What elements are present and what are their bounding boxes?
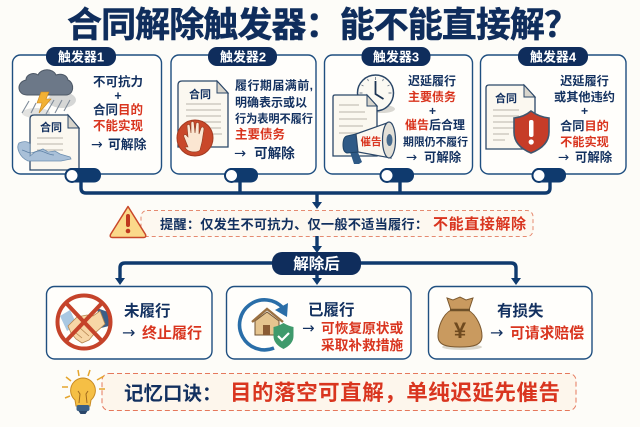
text: trigger 3 conditions: + [429,104,436,118]
text: trigger 3 conditions: 主要债务 [408,89,456,104]
text: trigger 4 conditions [554,73,615,166]
text: trigger 2 conditions: 明确表示或以 [235,94,307,110]
connector knobs [65,168,566,182]
icon: document [333,95,377,156]
text: performed outcome: 已履行 [308,301,355,319]
connector network from triggers [81,180,550,209]
panel: not performed [46,286,212,359]
text: not performed outcome: 未履行 [124,302,171,320]
text: trigger 3 conditions: → [406,150,417,166]
text: trigger 1 conditions: + [114,89,122,103]
text: trigger 4 conditions: → [558,150,569,166]
heading: trigger 1: 触发器1 [58,50,104,64]
heading: trigger 2 [208,47,277,66]
text: trigger 2 conditions: 行为表明不履行 [235,112,313,126]
text: performed outcome: 可恢复原状或 [321,320,403,336]
text: trigger 3 conditions: 催告后合理 [405,117,465,132]
icon: money bag [438,297,482,350]
text: trigger 1 conditions: 不能实现 [93,118,143,133]
icon: contract document [486,85,535,149]
callout: warning reminder: 不能直接解除 [433,215,526,233]
heading: trigger 4: 触发器4 [530,50,577,64]
text: trigger 4 conditions: 可解除 [575,150,613,164]
callout: memory tip: 目的落空可直解，单纯迟延先催告 [230,381,560,405]
text: performed outcome: 采取补救措施 [321,337,403,353]
icon: light bulb [62,370,105,414]
text: trigger 3 conditions: 期限仍不履行 [403,134,468,148]
arrow: to after-termination [312,236,322,253]
text: trigger 3 conditions: 可解除 [424,150,462,164]
heading: trigger 2: 触发器2 [220,50,266,64]
icon: storm cloud [19,70,76,118]
icon: megaphone: 催告 [360,135,382,148]
heading: trigger 3: 触发器3 [373,50,419,64]
text: loss outcome: 有损失 [497,302,544,320]
text: not performed outcome: 终止履行 [142,324,202,342]
panel: trigger 1 [12,47,162,174]
icon: warning shield [514,111,549,153]
panel: trigger 2 [171,47,316,174]
icon: stop hand [177,120,213,156]
text: trigger 3 conditions [403,73,468,166]
icon: contract document: 合同 [40,120,62,134]
text: trigger 2 conditions: 可解除 [254,145,295,161]
icon: contract document: 合同 [495,91,517,105]
text: trigger 1 conditions: 不可抗力 [93,74,143,89]
heading: trigger 4 [518,47,588,66]
text: trigger 3 conditions: 迟延履行 [408,73,456,88]
text: not performed outcome: → [122,323,135,342]
text: trigger 1 conditions: 合同目的 [93,102,143,117]
text: trigger 2 conditions: 履行期届满前, [235,78,313,92]
text: not performed outcome [122,302,202,342]
panel: performed [226,286,411,359]
icon: crossed handshake [58,296,110,348]
heading: after termination: 解除后 [293,254,340,273]
text: trigger 2 conditions [234,78,313,162]
icon: flood water [18,142,71,161]
text: loss outcome: 可请求赔偿 [510,324,584,342]
text: trigger 2 conditions: → [234,146,246,162]
text: trigger 4 conditions: 或其他违约 [554,89,615,104]
text: trigger 4 conditions: + [581,104,588,118]
panel: loss [428,286,592,359]
text: loss outcome: → [490,323,503,342]
icon: warning triangle [110,206,146,238]
text: trigger 1 conditions [91,74,147,153]
text: performed outcome: → [302,319,315,337]
icon: clock [358,75,395,113]
callout: warning reminder [110,206,533,238]
text: performed outcome [302,301,403,353]
heading: trigger 3 [362,47,430,66]
panel: trigger 3 [324,47,472,174]
icon: contract document [30,115,79,170]
text: trigger 4 conditions: 合同目的 [560,118,609,133]
heading: trigger 1 [46,47,116,66]
heading: after termination [272,252,361,275]
icon: megaphone [343,122,396,164]
text: trigger 1 conditions: → [91,137,103,153]
text: trigger 4 conditions: 不能实现 [560,134,609,149]
callout: memory tip [62,370,576,414]
text: loss outcome [490,302,584,342]
branch arrows [115,263,521,285]
icon: contract document: 合同 [189,87,211,101]
icon: contract document [178,81,228,147]
text: trigger 1 conditions: 可解除 [108,137,147,152]
panel: trigger 4 [480,47,626,174]
text: mnemonic: 记忆口诀： [124,383,222,405]
text: trigger 4 conditions: 迟延履行 [560,73,609,88]
title: 合同解除触发器：能不能直接解？ [67,6,579,45]
icon: money bag: ¥ [454,318,467,343]
text: reminder: 提醒：仅发生不可抗力、仅一般不适当履行： [160,216,428,232]
icon: house restore with shield [240,300,294,350]
text: trigger 2 conditions: 主要债务 [235,126,286,142]
